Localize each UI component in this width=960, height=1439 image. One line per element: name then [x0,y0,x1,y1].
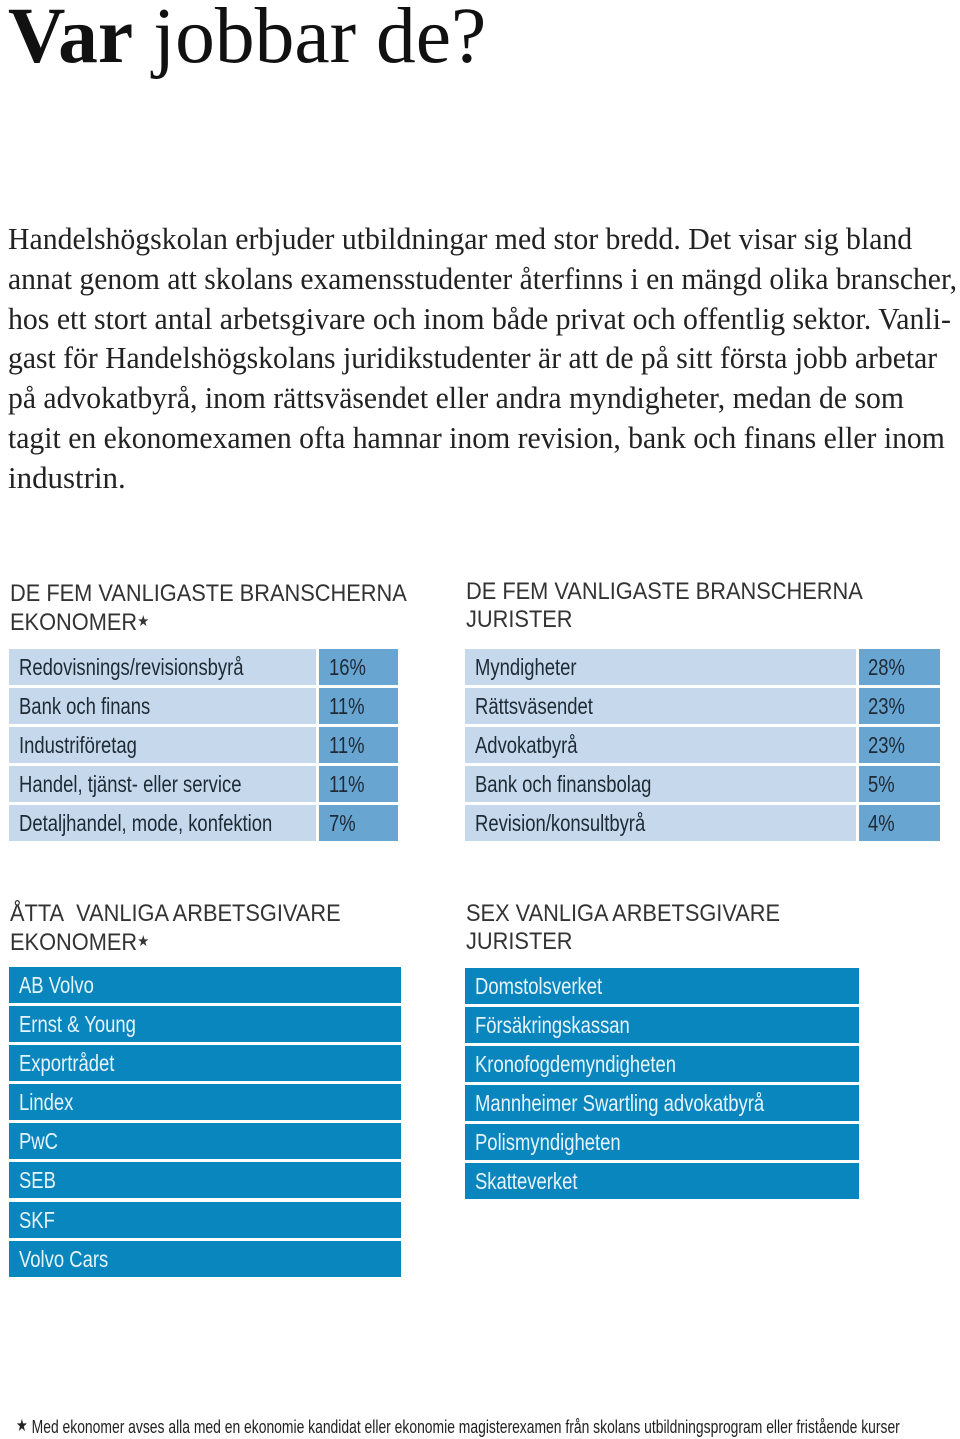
table: lawyers branches: Bank och finansbolag [475,771,651,797]
table: economists branches: 7% [329,810,356,836]
table: lawyers branches: 4% [868,810,895,836]
table: economists branches: Handel, tjänst- eller service [18,771,241,797]
list: economists employers: SKF [18,1207,54,1233]
intro text block: industrin. [8,460,126,495]
list: lawyers employers: Mannheimer Swartling advokatbyrå [475,1090,764,1116]
table: economists branches: Industriföretag [18,732,136,758]
table: economists branches: 11% [329,771,365,797]
table: economists branches: Bank och finans [18,693,150,719]
intro text block: annat genom att skolans examensstudenter återfinns i en mängd olika branscher, [8,261,957,296]
intro text block: tagit en ekonomexamen ofta hamnar inom revision, bank och finans eller inom [8,420,945,455]
table: lawyers branches: Rättsväsendet [475,693,593,719]
table: economists branches: Detaljhandel, mode, konfektion [18,810,272,836]
heading: employers economists: EKONOMER★ [10,929,149,956]
table: economists branches [9,649,398,841]
list: lawyers employers: Kronofogdemyndigheten [475,1051,676,1077]
table: lawyers branches: 5% [868,771,895,797]
table: economists branches: 16% [329,654,366,680]
table: economists branches: Redovisnings/revisionsbyrå [18,654,243,680]
list: economists employers [9,967,401,1277]
list: economists employers: Exportrådet [18,1050,114,1076]
heading: employers lawyers: SEX VANLIGA ARBETSGIVARE [466,900,780,927]
heading: employers economists [10,900,341,956]
list: economists employers: AB Volvo [18,972,93,998]
footnote: ★ Med ekonomer avses alla med en ekonomie kandidat eller ekonomie magisterexamen från skolans utbildningsprogram eller fristående kurser [16,1416,900,1437]
table: economists branches: 11% [329,693,365,719]
heading: branches lawyers: JURISTER [466,606,573,633]
table: economists branches: 11% [329,732,365,758]
heading: employers lawyers: JURISTER [466,928,573,955]
intro text block [8,221,957,495]
list: lawyers employers: Polismyndigheten [475,1129,621,1155]
intro text block: gast för Handelshögskolans juridikstudenter är att de på sitt första jobb arbetar [8,340,937,375]
list: economists employers: Volvo Cars [18,1246,108,1272]
list: economists employers: PwC [18,1128,57,1154]
table: lawyers branches: Myndigheter [475,654,577,680]
table: lawyers branches: Advokatbyrå [475,732,578,758]
heading: branches lawyers: DE FEM VANLIGASTE BRANSCHERNA [466,578,863,605]
list: lawyers employers: Domstolsverket [475,973,602,999]
intro text block: Handelshögskolan erbjuder utbildningar med stor bredd. Det visar sig bland [8,221,912,256]
list: lawyers employers [465,968,859,1199]
heading: branches economists: EKONOMER★ [10,609,149,636]
intro text block: hos ett stort antal arbetsgivare och inom både privat och offentlig sektor. Vanli- [8,301,951,336]
list: lawyers employers: Försäkringskassan [475,1012,630,1038]
table: lawyers branches: 23% [868,693,905,719]
heading: branches lawyers [466,578,863,633]
list: economists employers: Lindex [18,1089,73,1115]
list: lawyers employers: Skatteverket [475,1168,578,1194]
table: lawyers branches: 23% [868,732,905,758]
heading: branches economists [10,580,407,636]
table: lawyers branches [465,649,940,841]
list: economists employers: Ernst & Young [18,1011,135,1037]
intro text block: på advokatbyrå, inom rättsväsendet eller andra myndigheter, medan de som [8,380,904,415]
heading: employers economists: ÅTTA VANLIGA ARBETSGIVARE [10,900,341,927]
heading: employers lawyers [466,900,780,955]
table: lawyers branches: Revision/konsultbyrå [475,810,645,836]
heading: branches economists: DE FEM VANLIGASTE BRANSCHERNA [10,580,407,607]
table: lawyers branches: 28% [868,654,905,680]
list: economists employers: SEB [18,1167,55,1193]
